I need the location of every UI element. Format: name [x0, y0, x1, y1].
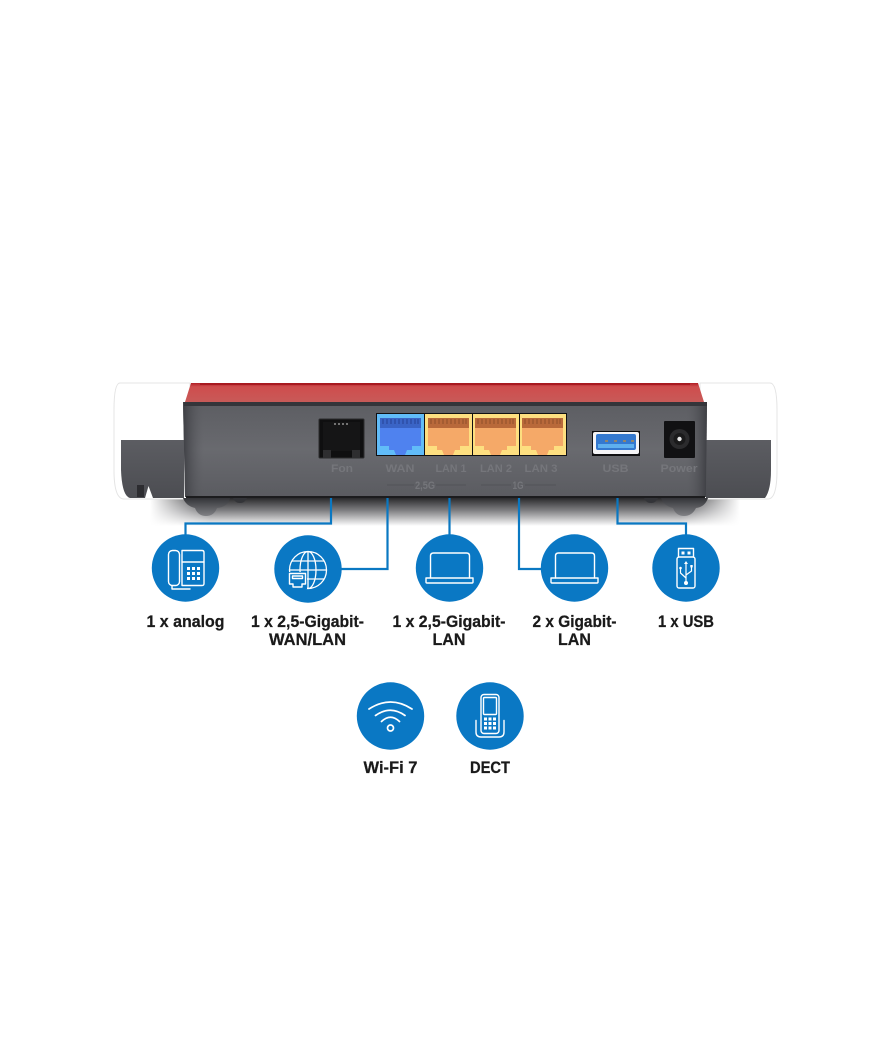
engraved port labels: Fon: [331, 463, 353, 475]
engraved port labels: 1G: [512, 480, 524, 492]
label: 1 x 2,5-Gigabit-LAN: [392, 613, 506, 649]
port: Fon: [319, 419, 364, 458]
port: USB: [592, 431, 640, 456]
label: DECT: DECT: [470, 759, 510, 777]
icon: DECT handset: [456, 682, 524, 750]
icon: laptop: [416, 534, 483, 602]
icon: USB stick: [652, 534, 720, 602]
icon: laptop: [541, 534, 608, 602]
rubber feet: [183, 498, 708, 516]
label: 2 x Gigabit-LAN: [532, 613, 616, 649]
router: [114, 383, 777, 526]
icon: analog phone: [152, 534, 219, 602]
engraved port labels: 2,5G: [415, 480, 435, 492]
engraved port labels: Power: [660, 463, 698, 475]
left white cap: [114, 383, 190, 499]
engraved port labels: LAN 1: [436, 463, 466, 475]
engraved port labels: [331, 463, 698, 492]
label: 1 x USB: 1 x USB: [658, 613, 714, 631]
icon: globe with LAN port: [274, 535, 342, 603]
right white cap: [700, 383, 777, 499]
port: Power: [664, 421, 695, 458]
red top: [185, 383, 704, 402]
connector lines: [186, 498, 686, 569]
engraved port labels: WAN: [386, 463, 415, 475]
floor shadow: [150, 498, 740, 526]
label: 2 x Gigabit-LAN: LAN: [558, 631, 591, 649]
label: 2 x Gigabit-LAN: 2 x Gigabit-: [532, 613, 616, 631]
label: 1 x 2,5-Gigabit-WAN/LAN: WAN/LAN: [269, 631, 346, 649]
label: 1 x 2,5-Gigabit-WAN/LAN: 1 x 2,5-Gigabit-: [251, 613, 364, 631]
label: 1 x 2,5-Gigabit-LAN: 1 x 2,5-Gigabit-: [392, 613, 506, 631]
grey body: [183, 402, 707, 497]
label: 1 x 2,5-Gigabit-LAN: LAN: [432, 631, 466, 649]
left grey wing: [121, 440, 184, 498]
label: Wi-Fi 7: Wi-Fi 7: [364, 759, 418, 777]
right grey wing: [706, 440, 771, 498]
icon: Wi-Fi: [357, 682, 424, 750]
engraved port labels: LAN 3: [524, 463, 558, 475]
label: 1 x analog: 1 x analog: [146, 613, 224, 631]
port: LAN 3: [520, 414, 566, 455]
port: LAN 1: [425, 414, 472, 455]
port: WAN: [377, 414, 424, 455]
engraved port labels: LAN 2: [480, 463, 512, 475]
port: WAN and LAN block: [376, 413, 567, 456]
engraved port labels: USB: [602, 463, 629, 475]
label: 1 x 2,5-Gigabit-WAN/LAN: [251, 613, 364, 649]
port: LAN 2: [473, 414, 519, 455]
